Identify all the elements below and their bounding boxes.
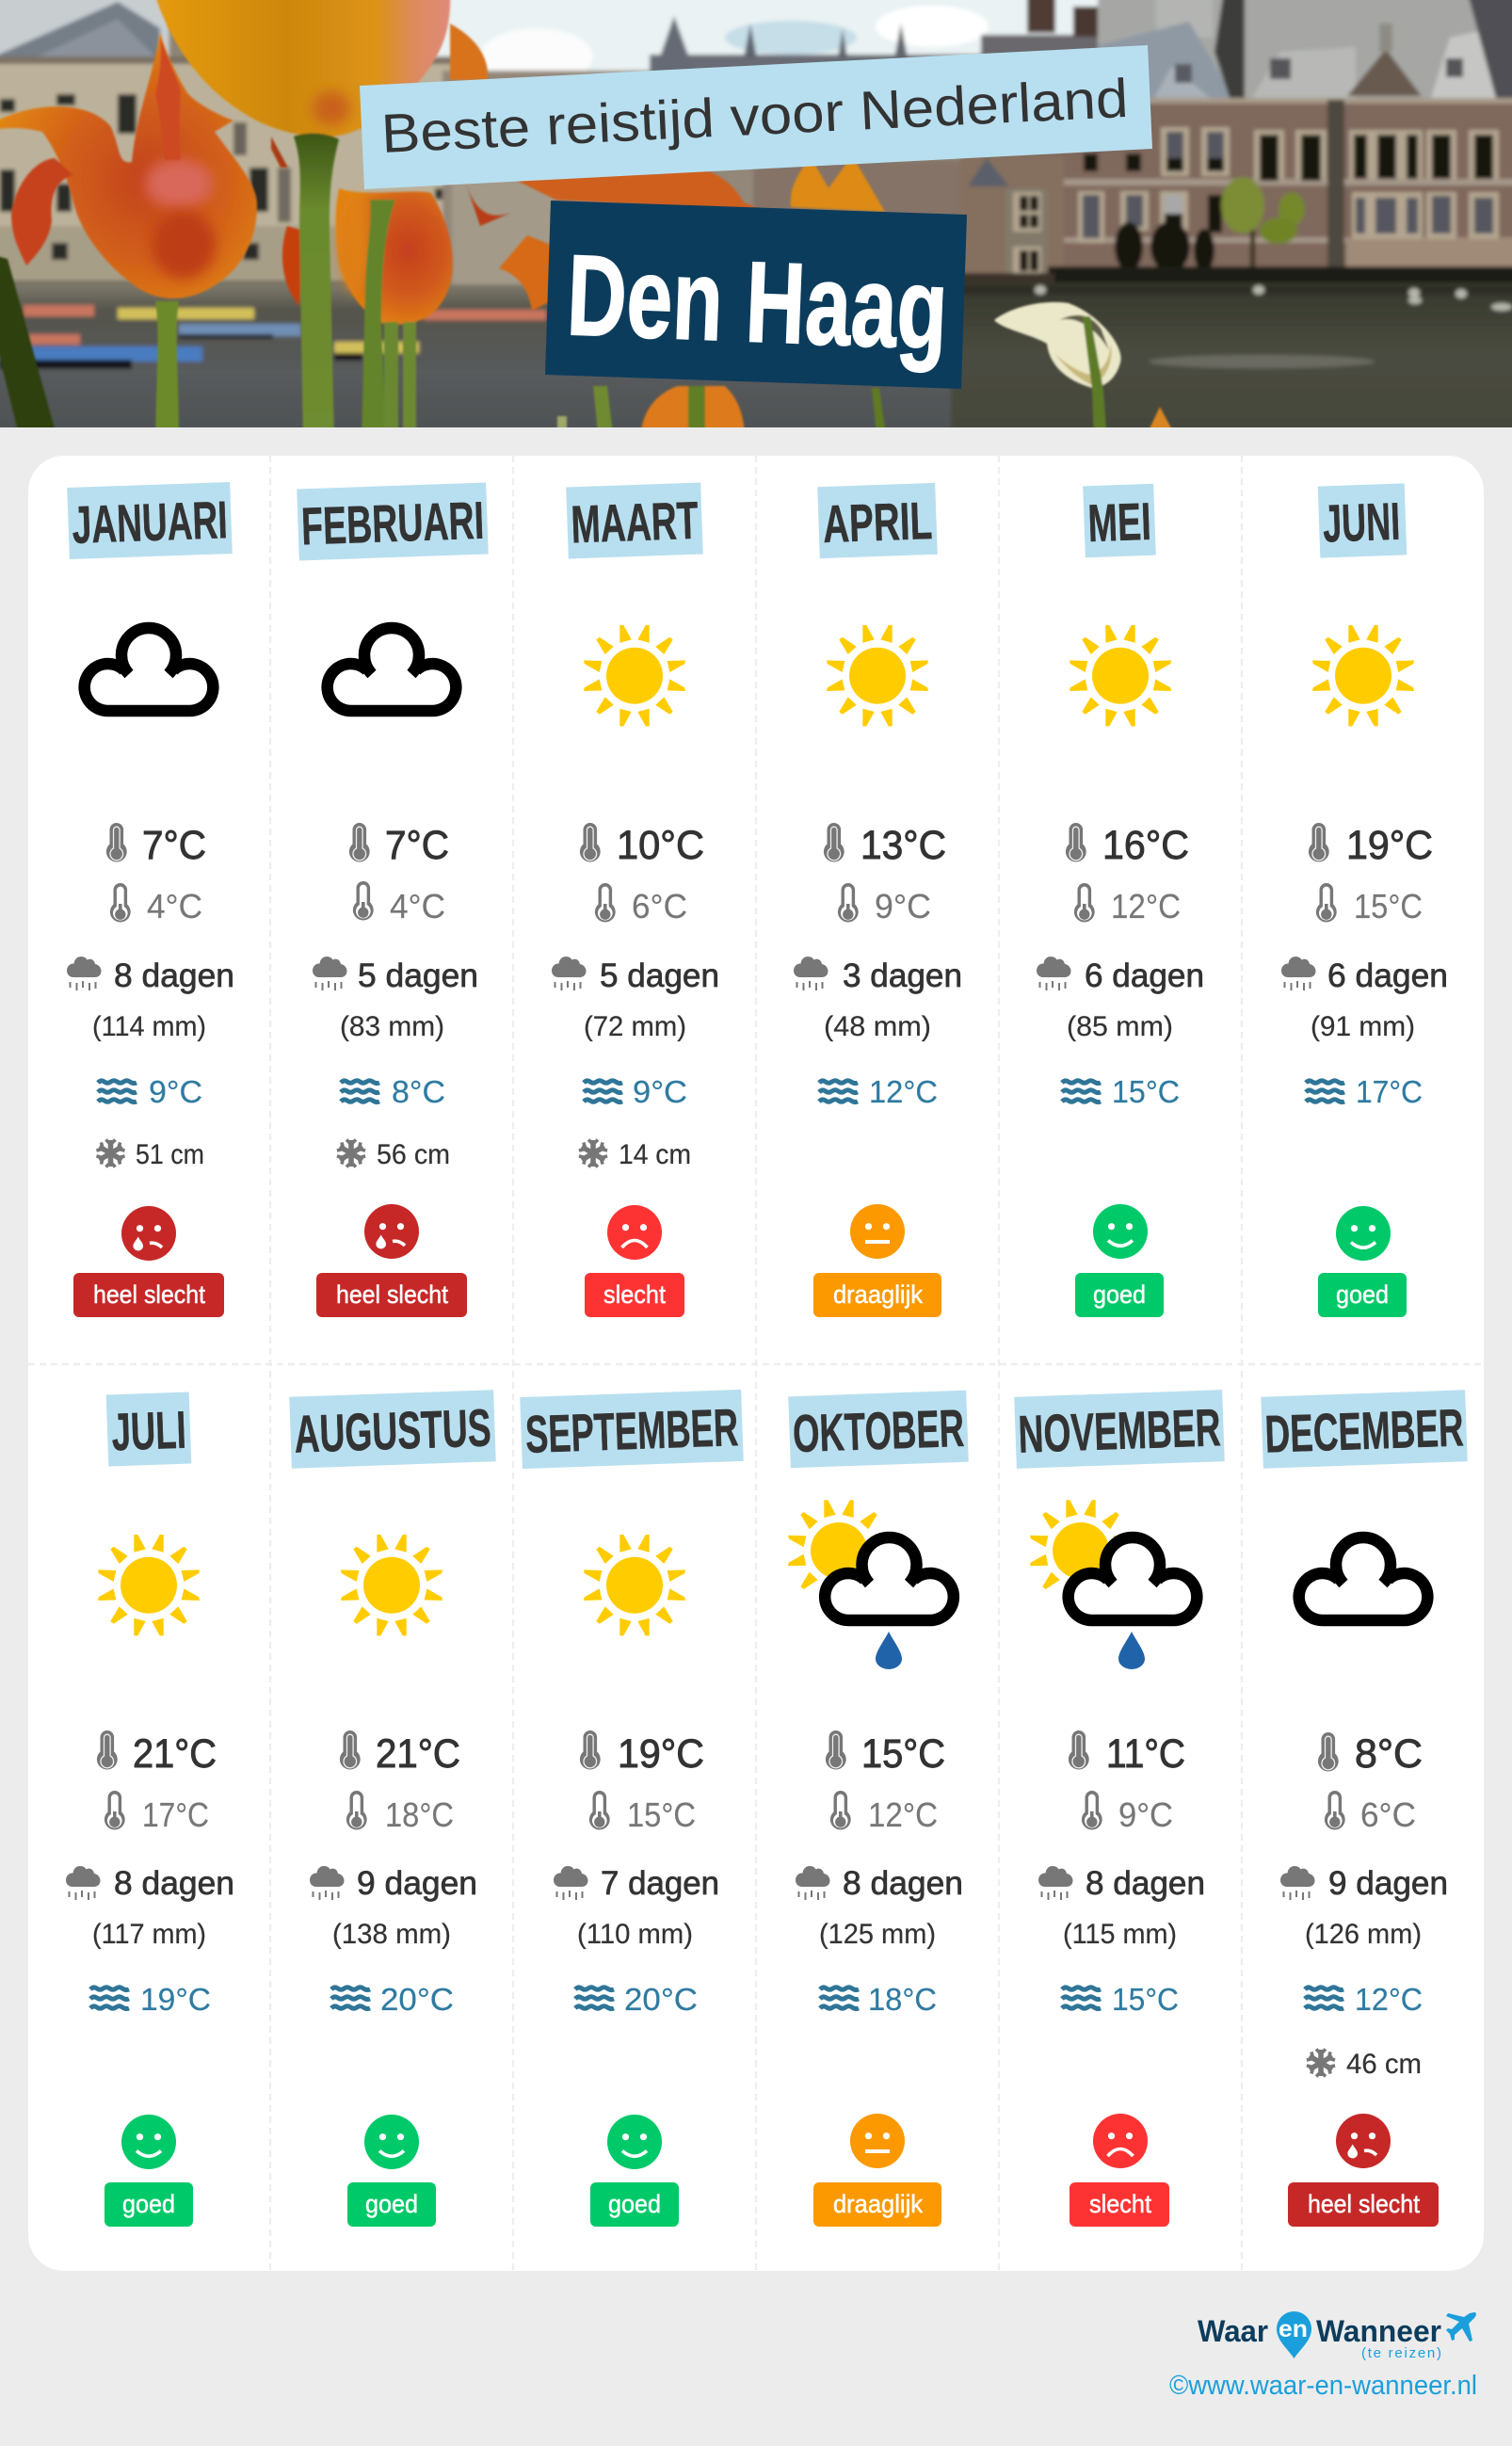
icon: cloud (85, 628, 213, 711)
rating badge (1075, 1273, 1164, 1317)
rain days: 5 dagen (600, 957, 719, 994)
rating badge: goed (365, 2190, 418, 2218)
heading: mei (1083, 484, 1156, 557)
heading: oktober (788, 1391, 969, 1468)
water temperature: 8°C (392, 1074, 445, 1109)
rainfall: (91 mm) (1311, 1011, 1415, 1042)
water temperature: 19°C (140, 1982, 211, 2017)
water temperature: 9°C (149, 1074, 202, 1109)
rain days: 3 dagen (843, 957, 962, 994)
rating badge: heel slecht (1308, 2190, 1420, 2218)
min temperature (1316, 883, 1423, 925)
smiley: goed (607, 2115, 662, 2169)
max temperature (97, 1730, 217, 1777)
rating badge (1288, 2182, 1439, 2227)
rain days: 8 dagen (114, 957, 234, 994)
min temperature: 6°C (632, 887, 687, 925)
heading: maart: MAART (570, 491, 700, 554)
rain days: 9 dagen (1328, 1865, 1448, 1902)
water temperature: 20°C (624, 1982, 698, 2017)
water temperature (1305, 1982, 1423, 2017)
water temperature (819, 1074, 938, 1109)
heading: juli (106, 1392, 191, 1467)
min temperature: 4°C (147, 887, 202, 925)
water temperature (90, 1982, 211, 2017)
max temperature: 21°C (133, 1731, 217, 1777)
rain days (794, 957, 962, 994)
rating badge: heel slecht (336, 1280, 448, 1309)
snow: 46 cm (1346, 2049, 1422, 2080)
water temperature: 12°C (1355, 1982, 1423, 2017)
rain days (67, 957, 234, 994)
water temperature: 12°C (869, 1074, 938, 1109)
heading: juni: JUNI (1322, 491, 1401, 553)
panel: september (520, 1390, 744, 2227)
max temperature (340, 1730, 460, 1777)
rainfall: (117 mm) (92, 1919, 206, 1950)
min temperature: 4°C (390, 887, 445, 925)
rating badge: slecht (1089, 2190, 1151, 2218)
max temperature: 19°C (1346, 823, 1433, 868)
rating badge (585, 1273, 684, 1317)
smiley: slecht (1093, 2114, 1148, 2168)
panel: april (794, 483, 962, 1317)
water temperature (1062, 1982, 1179, 2017)
header photo: tulips at the Binnenhof (0, 0, 1512, 427)
max temperature: 7°C (142, 823, 206, 868)
snow (1307, 2049, 1422, 2080)
max temperature: 8°C (1355, 1731, 1423, 1777)
min temperature: 12°C (1111, 887, 1181, 925)
rating badge (73, 1273, 224, 1317)
panel: mei (1037, 484, 1204, 1317)
title banner (360, 45, 1152, 189)
smiley: goed (121, 2115, 176, 2169)
rating badge: draaglijk (833, 2190, 923, 2218)
rainfall: (72 mm) (584, 1011, 686, 1042)
water temperature: 20°C (380, 1982, 454, 2017)
max temperature (826, 1730, 945, 1777)
min temperature: 12°C (868, 1795, 938, 1834)
rainfall: (126 mm) (1305, 1919, 1422, 1950)
min temperature: 9°C (1118, 1795, 1173, 1834)
water temperature (1306, 1074, 1423, 1109)
water temperature (98, 1074, 202, 1109)
rainfall: (83 mm) (340, 1011, 444, 1042)
rain days: 8 dagen (1086, 1865, 1205, 1902)
panel: juli (66, 1392, 234, 2227)
icon: sun (1070, 625, 1171, 726)
min temperature: 15°C (627, 1795, 696, 1834)
water temperature (341, 1074, 445, 1109)
min temperature: 18°C (385, 1795, 454, 1834)
panel: augustus (289, 1390, 496, 2227)
water temperature: 9°C (633, 1074, 687, 1109)
heading: maart (566, 483, 703, 558)
panel: januari (67, 482, 234, 1317)
logo: Waar en Wanneer: (te reizen) (1361, 2345, 1441, 2361)
title banner: Beste reistijd voor Nederland (380, 68, 1130, 165)
icon: sun (584, 1535, 685, 1635)
panel: juni (1281, 483, 1448, 1317)
heading: april (817, 483, 938, 558)
min temperature (595, 883, 687, 925)
max temperature (1309, 823, 1433, 868)
rating badge (813, 2182, 941, 2227)
heading: augustus: AUGUSTUS (294, 1397, 492, 1464)
snow (579, 1139, 691, 1170)
rating badge: goed (122, 2190, 175, 2218)
water temperature: 17°C (1356, 1074, 1423, 1109)
city banner: Den Haag (565, 231, 950, 373)
max temperature: 10°C (617, 823, 704, 868)
rainfall: (115 mm) (1063, 1919, 1177, 1950)
snow: 51 cm (136, 1139, 204, 1170)
rating badge: draaglijk (833, 1280, 923, 1309)
rating badge (316, 1273, 467, 1317)
max temperature (349, 823, 449, 868)
rainfall: (125 mm) (819, 1919, 936, 1950)
smiley: goed (1336, 1206, 1391, 1261)
max temperature (1318, 1731, 1423, 1777)
panel: februari (297, 483, 489, 1317)
rating badge: goed (1336, 1280, 1389, 1309)
panel: december (1261, 1390, 1468, 2227)
rain days: 9 dagen (357, 1865, 477, 1902)
panel: maart (552, 483, 719, 1317)
water temperature (1062, 1074, 1180, 1109)
rainfall: (114 mm) (92, 1011, 206, 1042)
rating badge (347, 2182, 436, 2227)
max temperature: 11°C (1106, 1731, 1185, 1777)
heading: augustus (289, 1390, 496, 1469)
rain days: 5 dagen (358, 957, 478, 994)
min temperature (1082, 1791, 1173, 1834)
rainfall: (48 mm) (824, 1011, 931, 1042)
logo: Waar en Wanneer: en (1279, 2316, 1308, 2342)
snow (96, 1139, 204, 1170)
icon: sun (98, 1535, 200, 1635)
smiley: goed (1093, 1204, 1148, 1259)
smiley: heel slecht (1336, 2114, 1391, 2168)
panel: oktober (788, 1391, 969, 2227)
snow: 14 cm (619, 1139, 691, 1170)
rain days: 6 dagen (1085, 957, 1204, 994)
max temperature: 16°C (1102, 823, 1189, 868)
heading: september: SEPTEMBER (524, 1397, 739, 1464)
heading: juni (1318, 483, 1407, 558)
snow (337, 1139, 450, 1170)
min temperature (1074, 883, 1181, 925)
heading: januari: JANUARI (72, 490, 229, 555)
white panel (28, 456, 1484, 2271)
website credit: ©www.waar-en-wanneer.nl (1169, 2371, 1477, 2401)
icon: sun, cloud and rain (788, 1500, 954, 1669)
icon: sun (584, 625, 685, 726)
max temperature: 21°C (376, 1731, 460, 1777)
smiley: heel slecht (364, 1204, 419, 1259)
rain days: 7 dagen (601, 1865, 719, 1902)
max temperature (1069, 1730, 1185, 1777)
min temperature (346, 1791, 454, 1834)
max temperature (580, 823, 704, 868)
water temperature (331, 1982, 454, 2017)
water temperature (584, 1074, 687, 1109)
heading: januari (67, 482, 233, 559)
rating badge: goed (608, 2190, 661, 2218)
icon: cloud (328, 628, 456, 711)
city banner (545, 201, 967, 389)
rating badge (1070, 2182, 1169, 2227)
min temperature: 9°C (875, 887, 931, 925)
max temperature (1066, 823, 1189, 868)
min temperature: 17°C (142, 1795, 209, 1834)
icon: sun (827, 625, 928, 726)
logo: Waar en Wanneer: Waar (1198, 2314, 1268, 2348)
rating badge: slecht (603, 1280, 666, 1309)
smiley: draaglijk (850, 1204, 905, 1259)
smiley: slecht (607, 1205, 662, 1260)
icon: sun, cloud and rain (1030, 1500, 1197, 1669)
water temperature: 15°C (1112, 1074, 1180, 1109)
rain days (1037, 957, 1204, 994)
logo: Waar en Wanneer (1198, 2311, 1476, 2361)
rain days: 8 dagen (843, 1865, 963, 1902)
panel: november (1014, 1390, 1225, 2227)
rating badge: goed (1093, 1280, 1146, 1309)
max temperature: 15°C (861, 1731, 945, 1777)
max temperature: 13°C (861, 823, 946, 868)
rain days: 8 dagen (114, 1865, 234, 1902)
max temperature: 7°C (385, 823, 449, 868)
rating badge (590, 2182, 679, 2227)
water temperature: 15°C (1112, 1982, 1179, 2017)
icon: cloud (1299, 1537, 1427, 1620)
min temperature (830, 1791, 938, 1834)
max temperature (824, 823, 946, 868)
snow: 56 cm (377, 1139, 450, 1170)
heading: februari (297, 483, 489, 560)
min temperature (589, 1791, 696, 1834)
smiley: goed (364, 2115, 419, 2169)
rainfall: (85 mm) (1067, 1011, 1173, 1042)
heading: oktober: OKTOBER (792, 1398, 965, 1463)
heading: september (520, 1390, 744, 1469)
max temperature (106, 823, 206, 868)
min temperature (838, 883, 931, 925)
rating badge (1318, 1273, 1407, 1317)
water temperature (820, 1982, 937, 2017)
rating badge (105, 2182, 193, 2227)
rain days (1281, 957, 1448, 994)
heading: juli: JULI (110, 1400, 187, 1461)
min temperature: 6°C (1360, 1795, 1416, 1834)
max temperature: 19°C (618, 1731, 704, 1777)
heading: april: APRIL (822, 491, 933, 554)
rain days: 6 dagen (1327, 957, 1448, 994)
rating badge: heel slecht (93, 1280, 205, 1309)
rainfall: (138 mm) (332, 1919, 451, 1950)
rainfall: (110 mm) (577, 1919, 693, 1950)
water temperature: 18°C (868, 1982, 937, 2017)
min temperature: 15°C (1354, 887, 1423, 925)
rating badge (813, 1273, 941, 1317)
water temperature (575, 1982, 698, 2017)
icon: sun (341, 1535, 442, 1635)
max temperature (580, 1730, 704, 1777)
heading: mei: MEI (1086, 491, 1152, 553)
smiley: draaglijk (850, 2114, 905, 2168)
min temperature (105, 1791, 209, 1834)
rain days (552, 957, 719, 994)
heading: november: NOVEMBER (1018, 1397, 1222, 1464)
heading: november (1014, 1390, 1225, 1469)
min temperature (353, 881, 445, 925)
min temperature (1325, 1791, 1416, 1834)
min temperature (110, 883, 202, 925)
heading: februari: FEBRUARI (300, 491, 485, 555)
logo: Waar en Wanneer: Wanneer (1316, 2314, 1441, 2348)
icon: sun (1312, 625, 1414, 726)
smiley: heel slecht (121, 1206, 176, 1261)
